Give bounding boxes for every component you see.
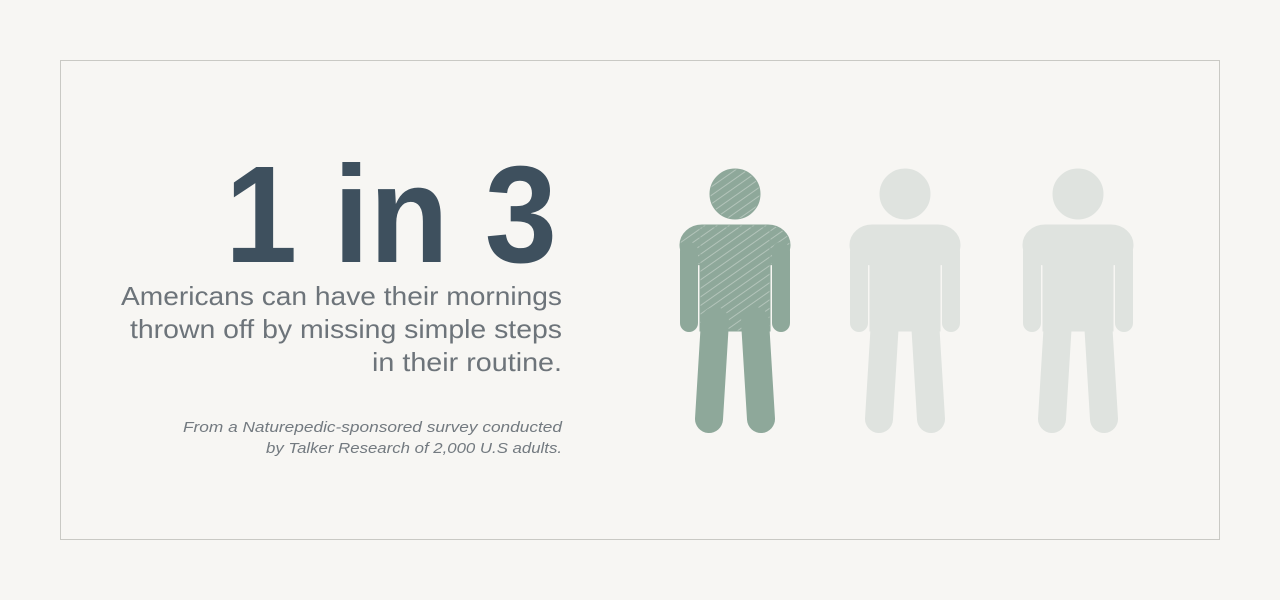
source footnote: [183, 419, 563, 457]
subtitle text: Americans can have their mornings: [121, 281, 562, 311]
subtitle text: thrown off by missing simple steps: [130, 314, 562, 344]
icon: grey person 2: [850, 169, 960, 419]
subtitle text: [121, 281, 562, 377]
frame panel: [60, 60, 1220, 540]
subtitle text: in their routine.: [372, 347, 562, 377]
icon: highlighted sketched person: [680, 169, 790, 419]
icon: grey person 3: [1023, 169, 1133, 419]
headline: 1 in 3: 1 in 3: [225, 138, 557, 292]
source footnote: From a Naturepedic-sponsored survey conducted: [183, 419, 563, 436]
source footnote: by Talker Research of 2,000 U.S adults.: [266, 440, 562, 457]
